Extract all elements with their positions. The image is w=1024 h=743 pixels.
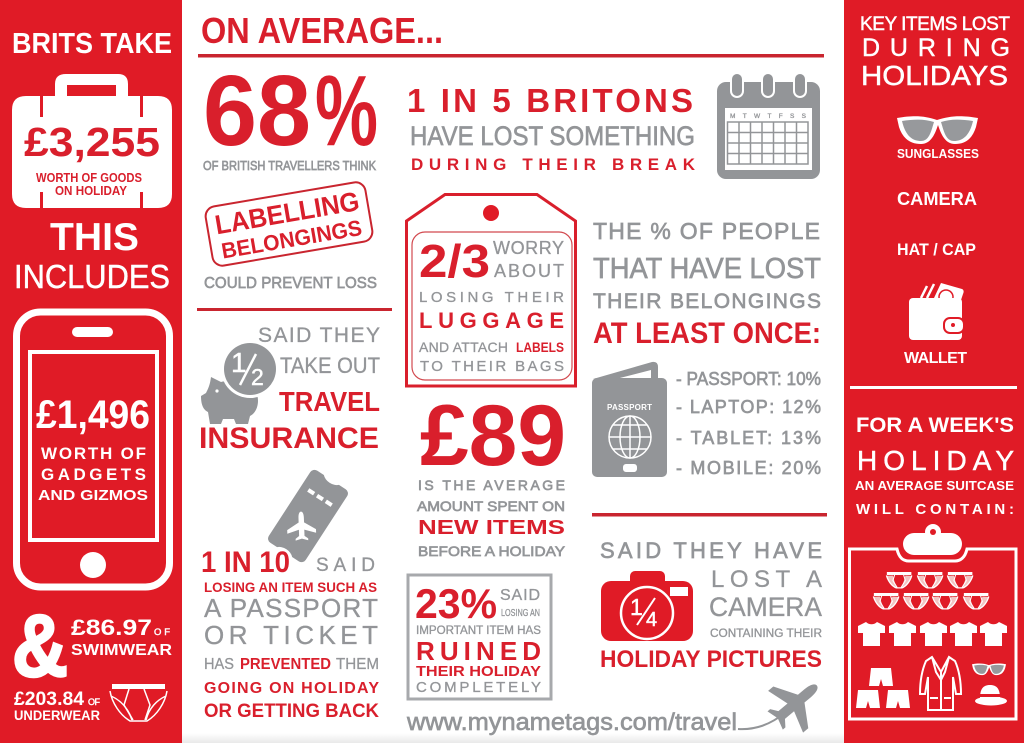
stat: 1 in 5 britons: HAVE LOST SOMETHING <box>410 121 695 151</box>
text: for a week's holiday: AN AVERAGE SUITCASE <box>855 479 1014 493</box>
icon: phone with gadgets value: AND GIZMOS <box>38 487 148 504</box>
icon: camera with quarter <box>601 571 693 641</box>
stat: quarter lost a camera: HOLIDAY PICTURES <box>600 646 822 673</box>
stat: 89 pounds: NEW ITEMS <box>418 517 565 539</box>
text: percentage of people who lost belongings: THE % OF PEOPLE <box>593 218 820 244</box>
heading: this includes: INCLUDES <box>14 258 170 295</box>
stat: 1 in 10: PREVENTED <box>240 656 331 673</box>
icon: phone with gadgets value: WORTH OF <box>41 444 146 463</box>
stat: 1 in 10: GOING ON HOLIDAY <box>204 680 379 697</box>
text: for a week's holiday <box>855 414 1014 518</box>
text: underwear value: OF <box>88 697 100 707</box>
list: lost items percentages: - MOBILE: 20% <box>676 458 821 478</box>
luggage tag: 2/3 worry: ABOUT <box>494 261 564 281</box>
stat: 89 pounds: IS THE AVERAGE <box>418 477 565 493</box>
stat: 1 in 10: SAID <box>316 555 375 576</box>
text: percentage of people who lost belongings: THEIR BELONGINGS <box>593 290 821 313</box>
text: percentage of people who lost belongings <box>593 218 821 350</box>
icon: calendar: MTWTFSS <box>730 113 807 120</box>
stat: 1 in 10 <box>201 546 379 722</box>
stat: 1 in 10: A PASSPORT <box>204 593 378 623</box>
icon: phone with gadgets value <box>16 312 170 587</box>
text: swimwear value: £86.97 <box>71 615 152 640</box>
stat: 1 in 10: LOSING AN ITEM SUCH AS <box>204 579 377 595</box>
icon: piggy bank with half coin: 2 <box>251 364 264 390</box>
list: lost items percentages: - TABLET: 13% <box>676 428 821 448</box>
t-shirts row <box>858 622 1007 646</box>
stat: 89 pounds: £89 <box>420 388 566 484</box>
icon: piggy bank with half coin: 1 <box>231 347 247 378</box>
stat: 1 in 5 britons <box>407 82 696 174</box>
list: lost items percentages: - LAPTOP: 12% <box>676 397 821 417</box>
stat: 89 pounds <box>417 388 566 559</box>
stat: 1 in 10: OR GETTING BACK <box>204 701 379 722</box>
panel: right red column <box>844 0 1024 743</box>
text: percentage of people who lost belongings: THAT HAVE LOST <box>593 253 821 285</box>
icon: open suitcase with contents <box>850 524 1016 719</box>
ampersand: & <box>12 596 68 695</box>
icon: suitcase with total value: £3,255 <box>24 119 160 165</box>
stat: half take out travel insurance: SAID THEY <box>258 324 380 347</box>
icon: passport: PASSPORT <box>607 403 652 412</box>
background bottom shading <box>182 733 844 743</box>
text: swimwear value <box>71 615 172 659</box>
icon: camera with quarter: 4 <box>646 609 657 631</box>
stat: 1 in 10: HAS <box>204 656 234 673</box>
heading: key items lost during holidays: KEY ITEMS LOST <box>860 14 1010 35</box>
text: underwear value: UNDERWEAR <box>14 708 100 723</box>
stat: 89 pounds: AMOUNT SPENT ON <box>417 499 565 514</box>
luggage tag: 2/3 worry: LABELS <box>516 339 564 355</box>
label: sunglasses: SUNGLASSES <box>897 147 979 161</box>
list: lost items percentages <box>676 369 821 478</box>
luggage tag: 2/3 worry: AND ATTACH <box>419 339 508 355</box>
stat: quarter lost a camera: LOST A <box>711 566 822 593</box>
text: underwear value: £203.84 <box>14 689 84 710</box>
panel: left red column <box>0 0 182 743</box>
label: hat or cap: HAT / CAP <box>897 240 976 259</box>
icon: wallet <box>909 283 964 340</box>
heading: this includes: THIS <box>50 216 139 259</box>
icon: calendar <box>717 73 820 179</box>
shorts <box>856 668 910 708</box>
text: for a week's holiday: WILL CONTAIN: <box>856 501 1014 518</box>
coat <box>920 657 961 710</box>
stat: 1 in 10: OR TICKET <box>204 620 378 650</box>
icon: phone with gadgets value: £1,496 <box>36 393 150 437</box>
stat: half take out travel insurance: TRAVEL <box>279 386 380 417</box>
luggage tag: 2/3 worry: LUGGAGE <box>419 308 564 333</box>
stat: 68 percent <box>203 55 378 173</box>
stamp: labelling belongings: BELONGINGS <box>220 215 364 264</box>
luggage tag: 2/3 worry: WORRY <box>493 238 564 258</box>
stamp: labelling belongings <box>204 181 374 267</box>
text: swimwear value: OF <box>154 627 170 638</box>
icon: plane ticket <box>266 468 350 564</box>
label: camera: CAMERA <box>897 189 977 209</box>
box: 23 percent ruined holiday: LOSING AN <box>501 607 540 619</box>
luggage tag: 2/3 worry: 2/3 <box>419 235 490 287</box>
stat: quarter lost a camera: CAMERA <box>709 592 822 622</box>
icon: airplane with trail <box>738 665 834 741</box>
box: 23 percent ruined holiday: SAID <box>500 587 540 604</box>
text: for a week's holiday: HOLIDAY <box>857 445 1014 476</box>
icon: underwear <box>110 684 167 721</box>
stat: 68 percent: % <box>315 55 378 167</box>
small sunglasses <box>972 664 1006 675</box>
icon: sunglasses <box>897 116 978 144</box>
icon: phone with gadgets value: GADGETS <box>41 465 146 484</box>
stat: quarter lost a camera <box>600 538 822 673</box>
stat: quarter lost a camera: SAID THEY HAVE <box>600 538 822 563</box>
box: 23 percent ruined holiday: RUINED <box>416 636 541 666</box>
box: 23 percent ruined holiday: IMPORTANT ITEM HAS <box>416 625 541 637</box>
icon: piggy bank with half coin <box>201 340 279 424</box>
list: lost items percentages: - PASSPORT: 10% <box>676 369 821 389</box>
text: could prevent loss: COULD PREVENT LOSS <box>204 275 377 292</box>
luggage tag: 2/3 worry <box>406 194 576 386</box>
stat: half take out travel insurance: TAKE OUT <box>280 353 380 378</box>
stat: 1 in 5 britons: 1 IN 5 BRITONS <box>407 82 693 119</box>
stat: half take out travel insurance <box>199 324 380 455</box>
underwear rows <box>873 572 989 609</box>
stat: 1 in 10: 1 IN 10 <box>201 546 290 579</box>
heading: brits take: BRITS TAKE <box>12 28 172 60</box>
icon: camera with quarter: 1 <box>630 594 643 620</box>
stat: 89 pounds: BEFORE A HOLIDAY <box>418 544 565 559</box>
box: 23 percent ruined holiday: THEIR HOLIDAY <box>416 663 541 680</box>
box: 23 percent ruined holiday: COMPLETELY <box>416 679 541 696</box>
box: 23 percent ruined holiday <box>408 575 551 699</box>
hat <box>975 685 1007 706</box>
website url: www.mynametags.com/travel <box>406 709 737 736</box>
stat: quarter lost a camera: CONTAINING THEIR <box>710 628 822 640</box>
icon: suitcase with total value: WORTH OF GOODS <box>36 171 142 185</box>
heading: key items lost during holidays: DURING <box>862 34 1010 62</box>
stat: 68 percent: 68 <box>203 55 311 167</box>
stat: half take out travel insurance: INSURANCE <box>199 422 379 455</box>
stat: 1 in 5 britons: DURING THEIR BREAK <box>411 155 696 174</box>
luggage tag: 2/3 worry: LOSING THEIR <box>419 289 564 306</box>
stamp: labelling belongings: LABELLING <box>213 186 362 240</box>
text: percentage of people who lost belongings: AT LEAST ONCE: <box>593 317 821 350</box>
text: swimwear value: SWIMWEAR <box>71 642 172 659</box>
text: for a week's holiday: FOR A WEEK'S <box>856 414 1014 437</box>
icon: suitcase with total value <box>12 74 172 208</box>
label: wallet: WALLET <box>904 350 967 367</box>
icon: passport <box>592 362 667 477</box>
stat: 1 in 10: THEM <box>336 656 379 673</box>
icon: suitcase with total value: ON HOLIDAY <box>55 184 128 198</box>
text: underwear value <box>14 689 100 723</box>
box: 23 percent ruined holiday: 23% <box>415 580 497 627</box>
heading: on average: ON AVERAGE... <box>201 10 443 51</box>
stat: 68 percent: OF BRITISH TRAVELLERS THINK <box>203 159 377 173</box>
luggage tag: 2/3 worry: TO THEIR BAGS <box>420 358 564 375</box>
heading: key items lost during holidays: HOLIDAYS <box>861 60 1008 91</box>
heading: this includes <box>14 216 170 295</box>
heading: key items lost during holidays <box>860 14 1010 91</box>
